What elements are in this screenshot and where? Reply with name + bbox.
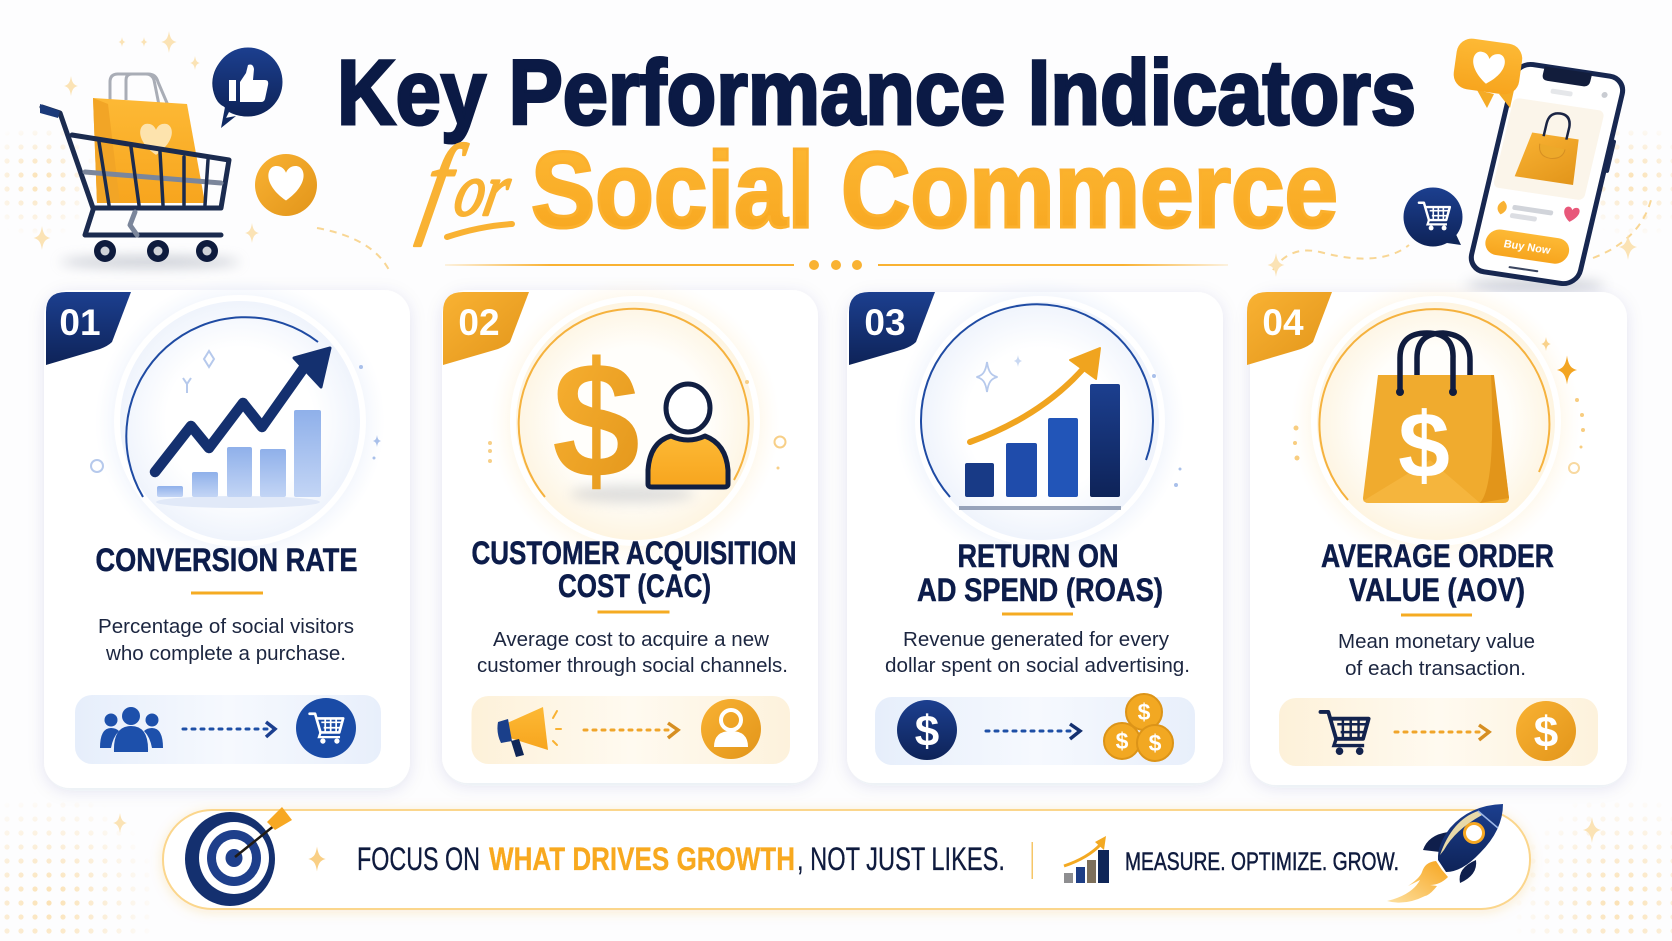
description: [477, 628, 788, 677]
title: for: or: [448, 148, 518, 231]
badge 03: [849, 292, 935, 365]
footer banner: [163, 804, 1530, 909]
icon: dollar circle: $: [1534, 708, 1558, 757]
icon: coins: [1104, 694, 1173, 761]
heading: VALUE (AOV): [1349, 572, 1525, 608]
badge 02: [443, 292, 529, 365]
description: dollar spent on social advertising.: [885, 654, 1190, 677]
flow strip: [75, 695, 381, 764]
divider: [445, 260, 1228, 270]
card 2 illustration circle: $: [552, 328, 640, 512]
card 3 illustration circle: [895, 277, 1185, 567]
card 3: return on ad spend: [847, 277, 1223, 783]
description: of each transaction.: [1345, 657, 1526, 680]
icon: rocket: [1387, 804, 1503, 903]
heading: [472, 535, 796, 604]
badge 04: 04: [1262, 302, 1304, 343]
flow strip: [875, 694, 1195, 765]
icon: dollar circle: [1516, 701, 1576, 761]
description: Percentage of social visitors: [98, 615, 354, 638]
icon: coins: $: [1149, 730, 1162, 756]
description: Mean monetary value: [1338, 630, 1535, 653]
heading: COST (CAC): [558, 568, 711, 604]
icon: orange heart speech bubble: [1452, 37, 1524, 108]
icon: target: [185, 807, 292, 906]
icon: megaphone: [497, 707, 561, 757]
icon: sparkle: [308, 846, 326, 872]
heading: AVERAGE ORDER: [1321, 538, 1554, 574]
badge 04: [1247, 292, 1332, 365]
flow strip: [472, 696, 790, 764]
description: customer through social channels.: [477, 654, 788, 677]
arrow: [183, 722, 275, 737]
phone button label: Buy Now: [1502, 238, 1552, 257]
icon: mini growth chart: [1064, 836, 1109, 883]
icon: navy cart: [1320, 712, 1369, 755]
icon: person circle: [701, 699, 761, 759]
flow strip: [1279, 698, 1598, 766]
title: Key Performance Indicators: Key Performance Indicators: [337, 42, 1416, 144]
description: [885, 628, 1190, 677]
card 4 illustration circle: $: [1398, 393, 1450, 497]
card 1 illustration circle: [91, 277, 385, 567]
heading: RETURN ON: [958, 538, 1118, 574]
icon: cart circle: [296, 698, 356, 758]
heading: AD SPEND (ROAS): [917, 572, 1163, 608]
badge 03: 03: [864, 302, 906, 343]
heading: CUSTOMER ACQUISITION: [472, 535, 796, 571]
arrow: [986, 724, 1080, 739]
footer message: [357, 841, 1005, 877]
footer message: FOCUS ON: [357, 841, 480, 877]
card 1: conversion rate: [44, 277, 410, 788]
heading: [917, 538, 1163, 608]
heading: [1321, 538, 1554, 608]
arrow: [584, 723, 678, 738]
description: Average cost to acquire a new: [493, 628, 769, 651]
illustration: shopping cart with bag: [40, 74, 240, 268]
description: who complete a purchase.: [105, 642, 346, 665]
footer message: WHAT DRIVES GROWTH: [489, 841, 795, 877]
card 4: average order value: [1247, 277, 1627, 785]
title: for: [413, 123, 524, 247]
icon: heart bubble: [255, 154, 317, 216]
icon: dollar circle: $: [915, 707, 939, 756]
badge 01: 01: [59, 302, 101, 343]
description: [98, 615, 354, 665]
arrow: [1395, 725, 1489, 740]
icon: people: [100, 707, 163, 752]
heading: CONVERSION RATE: [96, 542, 358, 578]
icon: coins: $: [1116, 728, 1129, 754]
card 2: customer acquisition cost: [442, 277, 818, 783]
icon: navy cart speech bubble: [1404, 188, 1462, 246]
description: Revenue generated for every: [903, 628, 1170, 651]
title: Social Commerce: Social Commerce: [531, 129, 1338, 250]
card 4 illustration circle: [1291, 277, 1585, 567]
illustration: phone with product: [1465, 62, 1631, 291]
description: [1338, 630, 1535, 680]
card 2 illustration circle: [488, 277, 786, 567]
badge 01: [46, 292, 131, 365]
icon: thumbs up bubble: [212, 48, 282, 128]
footer tagline: MEASURE. OPTIMIZE. GROW.: [1125, 848, 1399, 876]
footer message: , NOT JUST LIKES.: [797, 841, 1005, 877]
title: for: f: [413, 123, 474, 247]
icon: dollar circle: [897, 700, 957, 760]
icon: coins: $: [1138, 699, 1151, 725]
badge 02: 02: [458, 302, 500, 343]
